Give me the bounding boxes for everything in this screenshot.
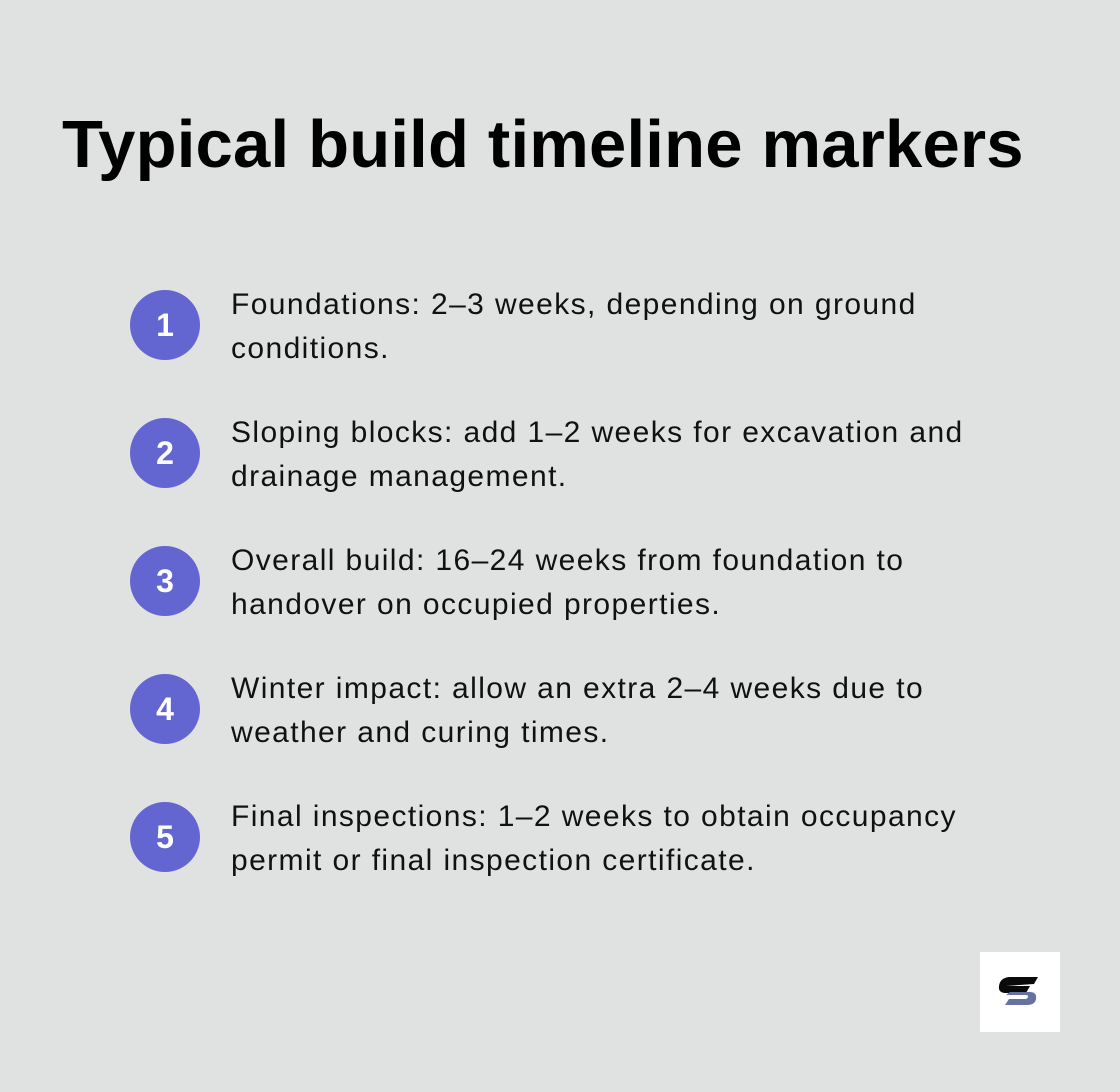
- badge 3: [130, 546, 200, 616]
- text 1: Foundations: 2–3 weeks, depending on ground: [231, 288, 917, 321]
- text 2: Sloping blocks: add 1–2 weeks for excavation and: [231, 416, 964, 449]
- text 4: Winter impact: allow an extra 2–4 weeks due to: [231, 672, 924, 705]
- text 3: [231, 544, 904, 621]
- text 2: [231, 416, 964, 493]
- text 5: permit or final inspection certificate.: [231, 844, 756, 877]
- badge 1: [130, 290, 200, 360]
- badge 5: [130, 802, 200, 872]
- badge 5: 5: [156, 819, 174, 855]
- title: Typical build timeline markers: [62, 107, 1024, 182]
- badge 2: [130, 418, 200, 488]
- item 4: [130, 672, 924, 749]
- text 1: [231, 288, 917, 365]
- text 4: weather and curing times.: [231, 716, 610, 749]
- item 3: [130, 544, 904, 621]
- item 1: [130, 288, 917, 365]
- text 2: drainage management.: [231, 460, 568, 493]
- text 3: Overall build: 16–24 weeks from foundation to: [231, 544, 904, 577]
- logo: [980, 952, 1060, 1032]
- text 5: [231, 800, 957, 877]
- text 4: [231, 672, 924, 749]
- item 5: [130, 800, 957, 877]
- badge 3: 3: [156, 563, 174, 599]
- item 2: [130, 416, 964, 493]
- text 3: handover on occupied properties.: [231, 588, 721, 621]
- text 1: conditions.: [231, 332, 390, 365]
- badge 2: 2: [156, 435, 174, 471]
- badge 4: [130, 674, 200, 744]
- badge 1: 1: [156, 307, 174, 343]
- text 5: Final inspections: 1–2 weeks to obtain occupancy: [231, 800, 957, 833]
- badge 4: 4: [156, 691, 174, 727]
